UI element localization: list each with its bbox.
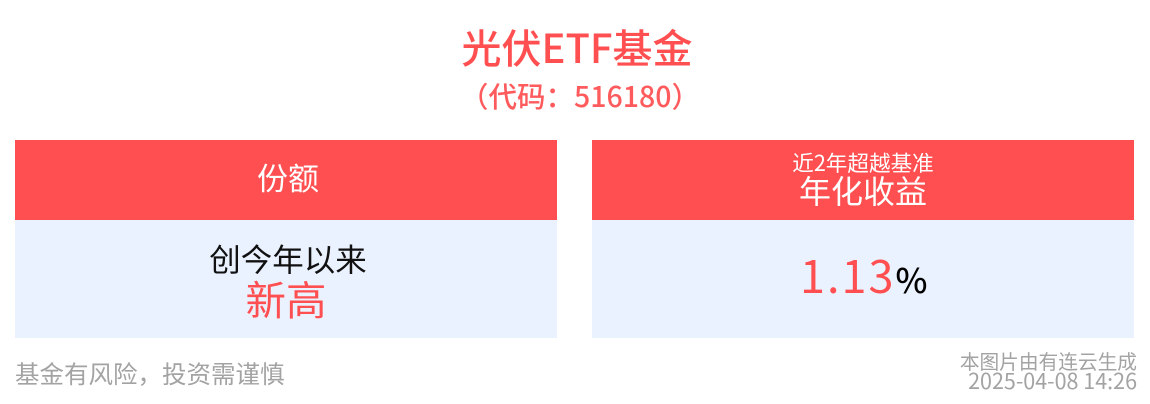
generation note	[960, 346, 1137, 396]
generation note: 2025-04-08 14:26	[968, 365, 1137, 396]
body text: year to date: 创今年以来	[209, 235, 367, 281]
header main label: 年化收益	[799, 167, 927, 213]
panel header: share	[15, 140, 557, 220]
panel: annualized excess return	[592, 140, 1134, 338]
panel: share	[15, 140, 557, 338]
generation note: 本图片由有连云生成	[960, 346, 1137, 375]
value: 1.13%: 1.13%	[800, 241, 927, 306]
body highlight: new high: 新高	[246, 268, 326, 327]
subtitle: fund code: （代码：516180）	[460, 75, 700, 116]
header label: share: 份额	[257, 154, 319, 199]
title: 光伏ETF基金	[461, 17, 693, 75]
risk disclaimer: 基金有风险，投资需谨慎	[15, 356, 284, 391]
header small label: 近2年超越基准	[792, 147, 934, 178]
panel header: annualized excess return	[592, 140, 1134, 220]
